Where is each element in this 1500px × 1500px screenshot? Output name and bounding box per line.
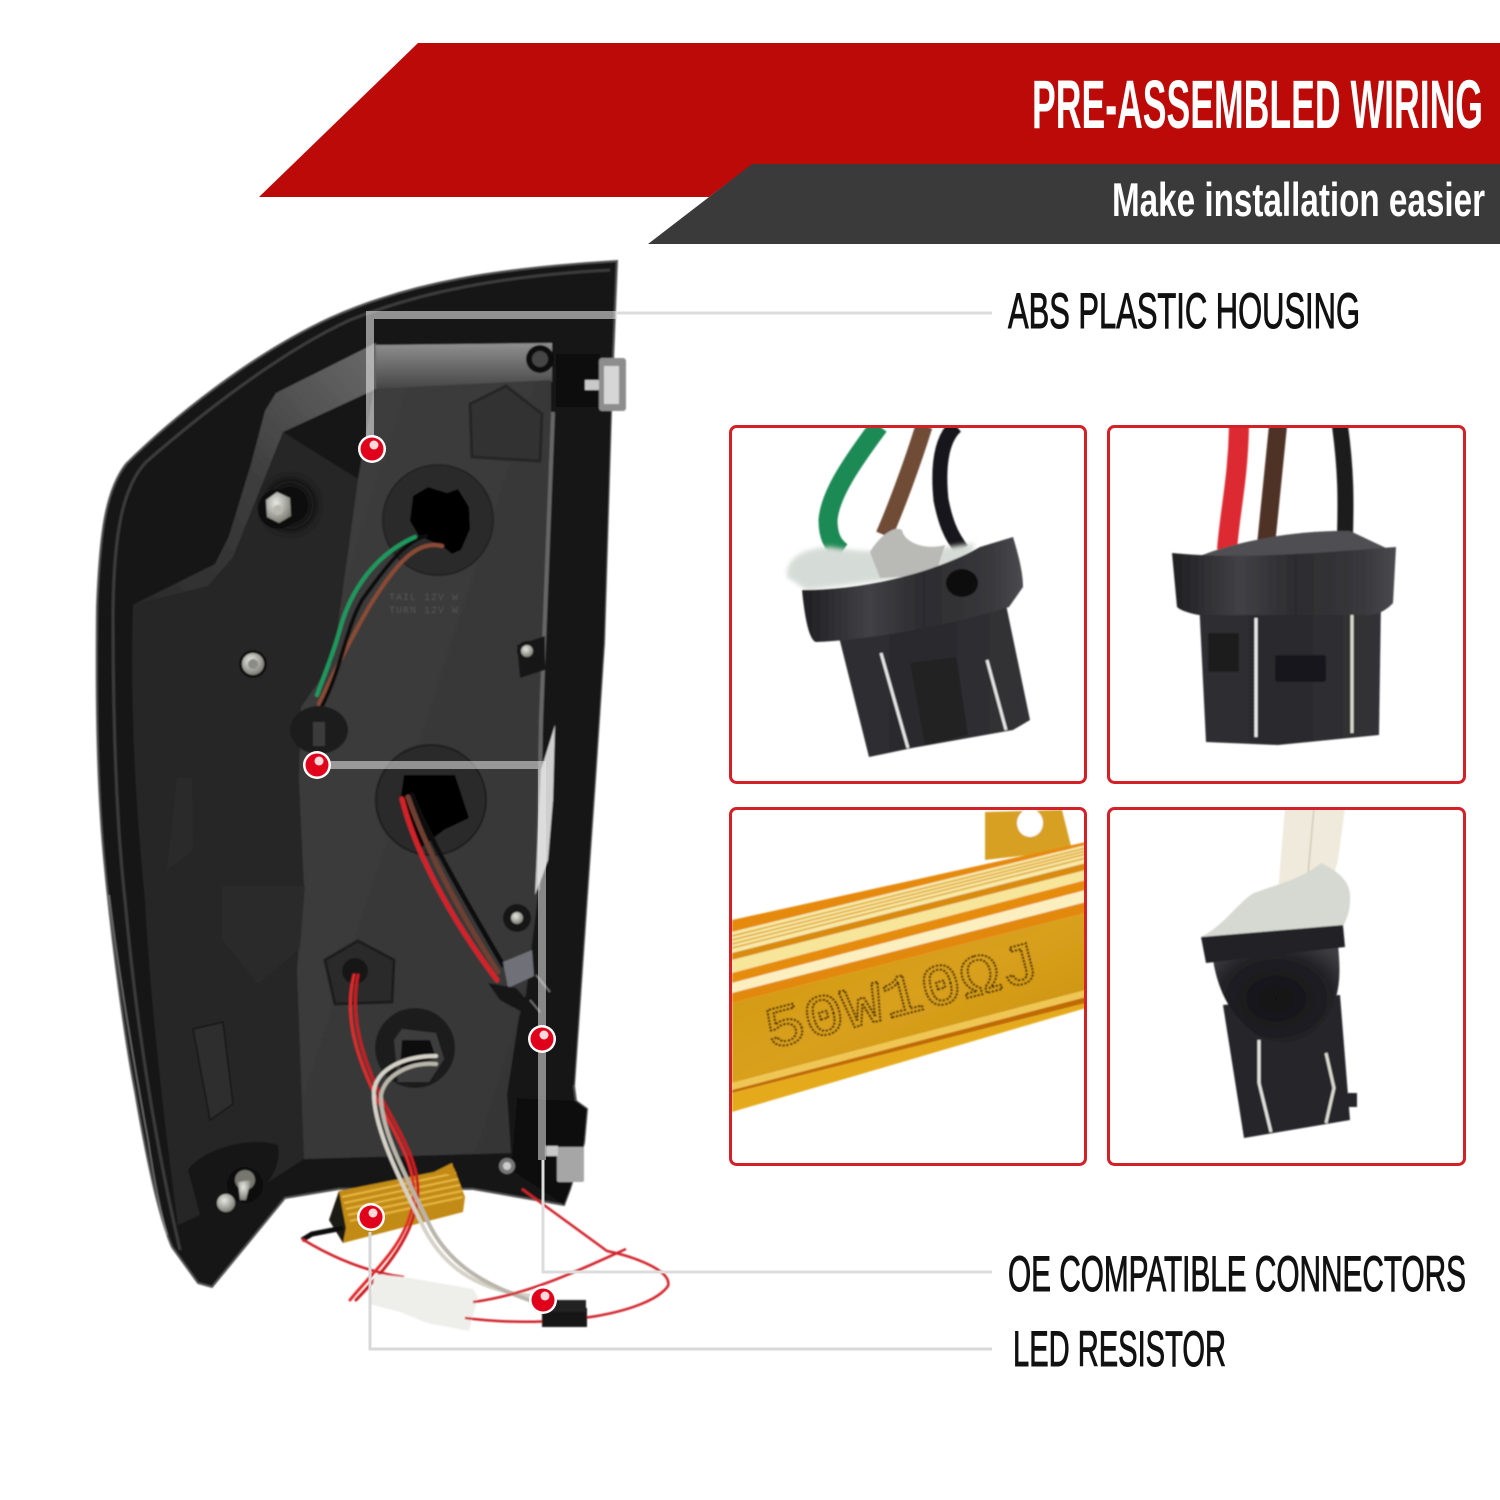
- panel: 7443 connector straight: [1108, 426, 1464, 782]
- header banner: [259, 43, 1500, 244]
- white pair wire: [374, 1056, 535, 1302]
- marker dot: [358, 435, 386, 463]
- upper bracket: [556, 354, 600, 407]
- callout: ABS plastic housing: [358, 283, 1360, 463]
- black wire: [1340, 426, 1345, 535]
- band cream three: [732, 890, 1086, 993]
- silicone blob: [787, 543, 975, 590]
- collar: [802, 537, 1023, 642]
- cream fins: [732, 845, 1086, 953]
- solder patch: [870, 529, 945, 578]
- red title band: [259, 43, 1500, 197]
- marker dot harness: [529, 1286, 557, 1314]
- embossed lamp markings second line: TURN 12V W: [389, 606, 459, 617]
- red pair wire: [350, 975, 418, 1300]
- dot-printed value: 50W10ΩJ: [758, 933, 1048, 1066]
- panel: 7443 connector angled: [730, 426, 1086, 782]
- socket grommet two: [376, 745, 486, 855]
- marker dot: [357, 1203, 385, 1231]
- connector photo: [787, 426, 1030, 757]
- band orange three: [732, 902, 1086, 1003]
- lower groove: [732, 997, 1086, 1093]
- translucent sealant: [1201, 863, 1350, 945]
- label: LED RESISTOR: [1013, 1321, 1226, 1377]
- socket grommet one: [383, 465, 493, 575]
- leader line outside: [617, 312, 992, 314]
- band cream two: [732, 870, 1086, 973]
- contact pin left: [1259, 1040, 1271, 1132]
- translucent leader: [330, 765, 542, 1160]
- socket grommet three: [375, 1008, 455, 1088]
- panel border: [1108, 808, 1464, 1164]
- contact pin right: [1350, 615, 1354, 733]
- screw top right: [526, 345, 554, 373]
- orange top edge: [732, 842, 1086, 932]
- raised pad: [222, 886, 305, 984]
- main gold face: [732, 913, 1086, 1083]
- black micro plug: [542, 1300, 587, 1327]
- lower highlight: [732, 990, 1086, 1090]
- green wire: [828, 426, 879, 552]
- label sticker: [535, 725, 555, 895]
- inner left field: [132, 432, 358, 1225]
- right channel: [538, 411, 611, 1086]
- panel border: [1108, 426, 1464, 782]
- callout: LED resistor: [357, 1203, 1226, 1377]
- lower lip: [732, 1003, 1086, 1112]
- rim glint: [109, 895, 167, 1235]
- connector photo: [1201, 808, 1357, 1138]
- black wire: [940, 426, 962, 550]
- channel highlight: [538, 412, 553, 890]
- contact pin left: [881, 653, 908, 748]
- base: [836, 595, 1030, 757]
- marker dot right: [528, 1025, 556, 1053]
- bottom left nut and washer: [188, 1142, 279, 1215]
- resistor lead: [302, 1228, 343, 1240]
- base nub: [1348, 1093, 1357, 1107]
- load resistor: [329, 1163, 465, 1243]
- nut upper left: [258, 481, 314, 529]
- inner rim: [113, 270, 610, 1250]
- panel border: [730, 426, 1086, 782]
- collar: [1172, 547, 1396, 615]
- screw lower right: [503, 904, 531, 932]
- lower bracket: [511, 1098, 587, 1205]
- leader line: [370, 1232, 992, 1349]
- fin lines: [732, 848, 1086, 948]
- recess side: [1208, 633, 1239, 672]
- white plastic connector: [369, 1274, 478, 1331]
- screw mid right: [517, 636, 545, 678]
- white wires: [1278, 808, 1345, 892]
- bottom screw: [499, 1158, 515, 1174]
- resistor photo: [732, 809, 1086, 1112]
- wire divider: [1307, 808, 1314, 885]
- panel: T10 wedge connector: [1108, 808, 1464, 1164]
- small bolt: [239, 650, 267, 678]
- knockout hole: [342, 958, 368, 984]
- marker dot left: [303, 751, 331, 779]
- lower clip: [546, 1146, 584, 1182]
- band orange one: [732, 863, 1086, 960]
- red wire: [1227, 426, 1239, 550]
- wires green brown black: [317, 536, 442, 706]
- inline connector: [488, 950, 550, 1014]
- recess: [910, 657, 968, 745]
- wires red brown black: [402, 795, 503, 980]
- brown wire: [1266, 426, 1278, 545]
- rear centre panel: [297, 380, 551, 1159]
- upper clip: [585, 358, 626, 411]
- lamp housing body: [97, 261, 617, 1287]
- dome: [1213, 945, 1339, 1042]
- leader line: [370, 315, 617, 445]
- recess centre: [1275, 655, 1326, 682]
- side slot upper: [167, 778, 193, 870]
- tab hole: [1017, 809, 1043, 837]
- solder smudge: [946, 569, 978, 597]
- glue: [1202, 530, 1386, 557]
- dark subtitle band: [648, 164, 1500, 244]
- contact pin left: [1254, 618, 1258, 737]
- embossed lamp markings: TAIL 12V W: [389, 593, 459, 604]
- red lead to connector: [302, 1239, 404, 1277]
- lower leader: [543, 1160, 992, 1272]
- base: [1199, 600, 1381, 745]
- brown wire: [884, 426, 924, 535]
- wire grommet: [290, 706, 348, 754]
- hex knockout lower: [325, 941, 394, 1004]
- sculpted bevel: [133, 343, 376, 605]
- thin red harness loops: [465, 1189, 668, 1322]
- panel: gold resistor close-up: [730, 808, 1086, 1164]
- wedge base: [1223, 995, 1350, 1138]
- collar: [1201, 925, 1345, 963]
- band orange two: [732, 880, 1086, 983]
- panel border: [730, 808, 1086, 1164]
- recessed left pocket: [136, 410, 261, 600]
- upper reflective band: [376, 343, 552, 389]
- connector photo: [1172, 426, 1396, 745]
- hex knockout top: [470, 386, 542, 461]
- side pad lower: [193, 1022, 233, 1120]
- callout: OE compatible connectors: [303, 751, 1466, 1314]
- mounting tab: [985, 810, 1072, 860]
- contact pin right: [987, 660, 1006, 730]
- contact pin right: [1326, 1053, 1334, 1123]
- tail lamp rear view: [97, 261, 668, 1331]
